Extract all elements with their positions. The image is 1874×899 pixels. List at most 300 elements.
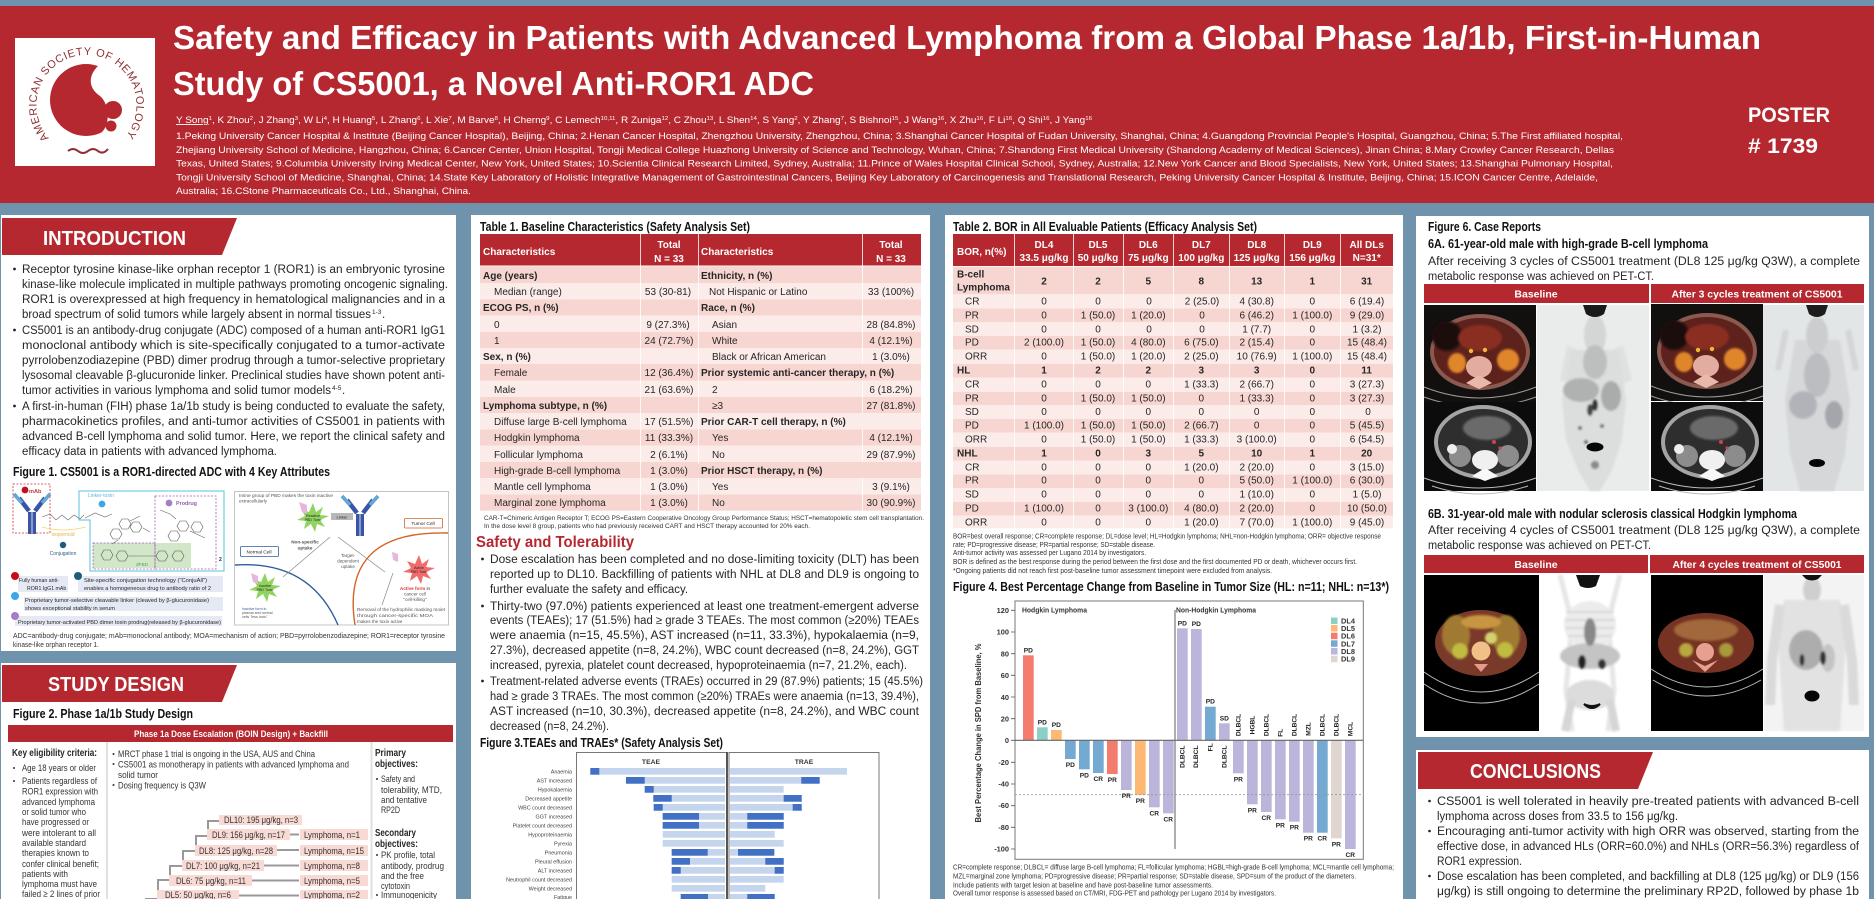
table 1: 6 (18.2%) bbox=[869, 385, 913, 396]
authors: Y Song 1, K Zhou 2, J Zhang 3, W Li 4, H Huang 5, L Zhang 6, L Xie 7, M Barve 8, H Cherng 9, C Lemech 10,11, R Zuniga 12, C Zhou 13, L Shen 14, S Yang 2, Y Zhang 7, S Bishnoi 15, J Wang 16, X Zhu 16, F Li 16, Q Shi 16, J Yang 16 bbox=[176, 115, 1092, 125]
figure 2 title: Figure 2. Phase 1a/1b Study Design bbox=[13, 707, 193, 721]
table 1: 0 bbox=[494, 320, 500, 331]
figure 1 title: Figure 1. CS5001 is a ROR1-directed ADC with 4 Key Attributes bbox=[13, 465, 330, 479]
subtype labels: DLBCL bbox=[1193, 746, 1200, 768]
table 2: 6 (46.2) bbox=[1239, 311, 1274, 322]
key eligibility criteria: Key eligibility criteria: bbox=[12, 748, 97, 759]
objectives: cytotoxin bbox=[381, 881, 410, 892]
table 2: 0 bbox=[1254, 407, 1260, 418]
table 1: Follicular lymphoma bbox=[494, 450, 583, 461]
figure 1 right: mechanism of action: Active form in bbox=[400, 586, 431, 591]
table 2: 6 (54.5) bbox=[1350, 435, 1384, 446]
table 2: 2 (66.7) bbox=[1184, 421, 1219, 432]
table 2: 0 bbox=[1199, 407, 1205, 418]
introduction text: kinase-like molecule implicated in multiple pathways promoting oncogenic signaling. bbox=[22, 279, 448, 291]
table 2: 1 bbox=[1310, 449, 1316, 460]
subtype labels: DLBCL bbox=[1236, 714, 1242, 736]
table 2: 0 bbox=[1365, 407, 1371, 418]
objectives: RP2D bbox=[381, 805, 400, 816]
table 2: N=31* bbox=[1353, 253, 1381, 264]
objectives: and tentative bbox=[381, 795, 427, 806]
table 1: Prior CAR-T cell therapy, n (%) bbox=[701, 417, 846, 428]
heading: introduction bbox=[2, 218, 237, 255]
table 1: Diffuse large B-cell lymphoma bbox=[494, 417, 627, 428]
introduction text: CS5001 is an antibody-drug conjugate (ADC) composed of a human anti-ROR1 IgG1 bbox=[22, 325, 445, 337]
panel: efficacy table and waterfall bbox=[945, 215, 1403, 899]
table 2: 15 (48.4) bbox=[1347, 352, 1387, 363]
figure 1 right: mechanism of action: cells "less toxic" bbox=[242, 615, 268, 619]
table 2: 1 (50.0) bbox=[1081, 421, 1115, 432]
table 2: 1 (50.0) bbox=[1131, 435, 1166, 446]
figure 4 footnotes: Include patients with target lesion at baseline and have post-baseline tumor assessments. bbox=[953, 880, 1213, 889]
response labels: CR bbox=[1164, 816, 1173, 823]
table 2: 50 μg/kg bbox=[1078, 253, 1118, 264]
dose escalation banner bbox=[8, 725, 453, 742]
table 2: 0 bbox=[1041, 490, 1047, 501]
dose escalation staircase: DL7: 100 μg/kg, n=21 bbox=[186, 861, 260, 872]
table 2 title: Table 2. BOR in All Evaluable Patients (Efficacy Analysis Set) bbox=[953, 220, 1257, 234]
y axis: -20 bbox=[998, 758, 1009, 767]
table 2 footnotes: *Ongoing patients did not reach first post-baseline tumor assessment timepoint were excluded from analysis. bbox=[953, 566, 1272, 575]
table 1: Race, n (%) bbox=[701, 303, 755, 314]
response labels: PR bbox=[1304, 836, 1313, 843]
subtype labels: MZL bbox=[1306, 722, 1312, 736]
figure 1 legend: Proprietary tumor-activated PBD dimer toxin prodrug(released by β-glucuronidase) bbox=[18, 620, 221, 626]
figure 4 waterfall chart: Hodgkin Lymphoma bbox=[1022, 607, 1087, 614]
response labels: PD bbox=[1192, 621, 1201, 628]
table 2: 2 (20.0) bbox=[1239, 504, 1274, 515]
TEAE category labels bbox=[506, 770, 572, 899]
table 2: 1 (20.0) bbox=[1184, 518, 1219, 529]
response labels: PD bbox=[1024, 647, 1033, 654]
subtype labels: FL bbox=[1278, 729, 1284, 737]
table 2: 0 bbox=[1310, 407, 1316, 418]
affiliations: Zhejiang University School of Medicine, Hangzhou, China; 6.Cancer Center, Union Hospital, Tongji Medical College Huazhong University of Science and Technology, Wuhan, China; 7.Shandong First Medical University (Shandong Academy of Medical Sciences), Jinan China; 8.Mary Crowley Cancer Research, Dellas bbox=[176, 145, 1615, 155]
table 2: 2 (15.4) bbox=[1239, 338, 1274, 349]
key eligibility criteria: confer clinical benefit; bbox=[22, 859, 99, 870]
table 2: 1 (100.0) bbox=[1024, 421, 1064, 432]
table 1: 30 (90.9%) bbox=[867, 498, 915, 509]
table 2: 0 bbox=[1310, 463, 1316, 474]
table 2: 1 (20.0) bbox=[1131, 311, 1166, 322]
case 6B column headers: Baseline bbox=[1514, 559, 1558, 571]
table 2: 100 μg/kg bbox=[1178, 253, 1224, 264]
conclusions text: μg/kg) is still ongoing to determine the preliminary RP2D, followed by phase 1b bbox=[1437, 886, 1859, 898]
legend: DL4 bbox=[1341, 616, 1356, 626]
table 2: 0 bbox=[1041, 394, 1047, 405]
case 6A baseline scans bbox=[1424, 305, 1649, 494]
figure 4 waterfall chart: Non-Hodgkin Lymphoma bbox=[1176, 607, 1256, 614]
introduction text: lysosomal cleavable β-glucuronide linker. Preclinical studies have shown potent anti- bbox=[22, 370, 445, 382]
case 6A text bbox=[1428, 237, 1860, 283]
safety text: were anaemia (n=15, 45.5%), AST increased (n=11, 33.3%), hypokalaemia (n=9, bbox=[489, 630, 919, 642]
table 2: 8 bbox=[1199, 277, 1205, 288]
response labels: PD bbox=[1178, 620, 1187, 627]
figure 1 right: mechanism of action: Active bbox=[414, 566, 424, 570]
safety text: reported up to DL10. Backfilling of patients with NHL at DL8 and DL9 is ongoing to bbox=[490, 569, 919, 581]
table 1: 2 (6.1%) bbox=[650, 450, 688, 461]
table 1: 53 (30-81) bbox=[645, 287, 691, 298]
figure 1 right: mechanism of action: Reactive bbox=[306, 514, 320, 518]
table 2: DL4 bbox=[1035, 240, 1054, 251]
figure 1 right: mechanism of action: makes the toxin active bbox=[357, 619, 403, 624]
table 2: 0 bbox=[1310, 435, 1316, 446]
table 2: 0 bbox=[1310, 394, 1316, 405]
safety text: events (TEAEs); 17 (51.5%) had ≥ grade 3 TEAEs. The most common (≥20%) TEAEs bbox=[490, 615, 919, 627]
figure 1 legend: Proprietary tumor-selective cleavable linker (cleaved by β-glucuronidase) bbox=[25, 598, 209, 604]
y axis: -40 bbox=[998, 780, 1009, 788]
table 1: ≥3 bbox=[712, 401, 723, 412]
table 2: 2 bbox=[1095, 366, 1101, 377]
table 1: Characteristics bbox=[701, 247, 774, 258]
TEAE category labels: WBC count decreased bbox=[518, 806, 572, 812]
table 2: 1 (3.2) bbox=[1353, 325, 1381, 336]
TEAE category labels: GGT increased bbox=[536, 814, 572, 820]
table 2: CR bbox=[965, 297, 979, 308]
figure 1 left: ADC structure: isoprenoid bbox=[51, 532, 75, 538]
dose escalation staircase: DL8: 125 μg/kg, n=28 bbox=[199, 846, 273, 857]
table 2: 0 bbox=[1146, 476, 1152, 487]
table 2: 1 (100.0) bbox=[1292, 352, 1332, 363]
case 6A post-treatment scans bbox=[1651, 304, 1864, 494]
table 1: High-grade B-cell lymphoma bbox=[494, 466, 621, 477]
figure 1 legend: shows exceptional stability in serum bbox=[25, 606, 115, 612]
title: Study of CS5001, a Novel Anti-ROR1 ADC bbox=[173, 66, 814, 103]
figure 1 footnote bbox=[13, 631, 445, 649]
table 2: 33.5 μg/kg bbox=[1020, 253, 1068, 264]
table 1: N = 33 bbox=[876, 254, 906, 265]
table 2: 2 bbox=[1095, 277, 1101, 288]
table 2: 0 bbox=[1310, 338, 1316, 349]
subtype labels: DLBCL bbox=[1222, 746, 1228, 768]
poster number: POSTER bbox=[1748, 104, 1830, 127]
subtype labels: DLBCL bbox=[1292, 714, 1298, 736]
table 2: 4 (30.8) bbox=[1239, 297, 1274, 308]
figure 1 footnote: ADC=antibody-drug conjugate; mAb=monoclonal antibody; MOA=mechanism of action; PBD=pyrrolobenzodiazepine; ROR1=receptor tyrosine bbox=[13, 631, 445, 640]
poster number: # 1739 bbox=[1748, 135, 1818, 158]
response labels: PR bbox=[1332, 841, 1341, 848]
response labels: PD bbox=[1206, 699, 1215, 706]
table 2: 20 bbox=[1361, 449, 1373, 460]
y axis: 0 bbox=[1005, 736, 1009, 745]
response labels: CR bbox=[1262, 815, 1271, 822]
table 2: CR bbox=[965, 463, 979, 474]
table 1: ECOG PS, n (%) bbox=[483, 303, 559, 314]
table 1: 11 (33.3%) bbox=[645, 433, 693, 444]
table 2: 2 bbox=[1041, 277, 1047, 288]
table 2: 0 bbox=[1254, 421, 1260, 432]
table 1: Black or African American bbox=[712, 352, 826, 363]
figure 1 legend: enables a homogeneous drug to antibody ratio of 2 bbox=[84, 586, 211, 592]
introduction text: . bbox=[342, 385, 345, 397]
TEAE category labels: Pyrexia bbox=[554, 842, 572, 848]
legend: DL9 bbox=[1341, 655, 1355, 664]
figure 1 legend: Site-specific conjugation technology ("ConjuAll") bbox=[84, 578, 207, 584]
figure 3 butterfly chart bbox=[506, 752, 879, 899]
dose escalation staircase: Lymphoma, n=5 bbox=[304, 876, 360, 887]
heading: study design bbox=[2, 665, 237, 702]
response labels: PR bbox=[1108, 777, 1117, 784]
table 2: 1 (50.0) bbox=[1081, 394, 1115, 405]
table 2: 2 bbox=[1146, 366, 1152, 377]
figure 4 waterfall chart bbox=[974, 601, 1363, 859]
table 2: 0 bbox=[1041, 297, 1047, 308]
figure 1 right: mechanism of action: uptake bbox=[341, 564, 355, 569]
table 2: 1 (100.0) bbox=[1292, 476, 1332, 487]
objectives: PK profile, total bbox=[381, 850, 435, 861]
table 1: 29 (87.9%) bbox=[867, 450, 915, 461]
table 1: Marginal zone lymphoma bbox=[494, 498, 606, 509]
figure 1 right: mechanism of action: Imine group of PBD makes the toxin inactive bbox=[239, 493, 333, 498]
table 2: 3 (100.0) bbox=[1128, 504, 1168, 515]
case 6B post-treatment scans bbox=[1651, 575, 1864, 731]
TEAE category labels: Hypoproteinaemia bbox=[528, 832, 572, 838]
table 2: PR bbox=[965, 394, 979, 405]
conclusions text: ROR1 expression. bbox=[1437, 856, 1522, 868]
panel: study design bbox=[1, 663, 456, 899]
objectives: objectives: bbox=[375, 839, 418, 850]
table 2: 2 (25.0) bbox=[1184, 352, 1219, 363]
TEAE category labels: Platelet count decreased bbox=[513, 824, 572, 830]
title bbox=[173, 20, 1761, 103]
table 2 footnotes: rate; PD=progressive disease; PR=partial response; SD=stable disease. bbox=[953, 540, 1155, 549]
table 2: 0 bbox=[1146, 407, 1152, 418]
table 2: 0 bbox=[1199, 325, 1205, 336]
objectives bbox=[375, 748, 444, 899]
table 1: Prior HSCT therapy, n (%) bbox=[701, 466, 822, 477]
y axis: -60 bbox=[998, 801, 1009, 810]
table 1: Yes bbox=[712, 482, 728, 493]
table 1: Age (years) bbox=[483, 271, 537, 282]
y axis: 100 bbox=[997, 628, 1009, 636]
table 2: 2 (20.0) bbox=[1239, 463, 1274, 474]
figure 1 right: mechanism of action: "cell-killing" bbox=[403, 597, 427, 602]
dose escalation staircase: DL6: 75 μg/kg, n=11 bbox=[176, 876, 246, 887]
TEAE category labels: Pleural effusion bbox=[535, 860, 572, 866]
case 6A text: 6A. 61-year-old male with high-grade B-cell lymphoma bbox=[1428, 237, 1709, 251]
table 2: 1 (33.3) bbox=[1184, 380, 1219, 391]
figure 4 footnotes: CR=complete response; DLBCL= diffuse large B-cell lymphoma; FL=follicular lymphoma; HGBL=high-grade B-cell lymphoma; MCL=mantle cell lymphoma; bbox=[953, 862, 1394, 871]
objectives: Secondary bbox=[375, 828, 416, 839]
study overview bullets: Dosing frequency is Q3W bbox=[118, 780, 207, 792]
case 6A column headers: Baseline bbox=[1514, 288, 1558, 300]
table 2: SD bbox=[965, 325, 979, 336]
y axis: Best Percentage Change in SPD from Baseline, % bbox=[974, 643, 983, 822]
figure 1 right: mechanism of action: Tumor Cell bbox=[411, 521, 435, 527]
figure 1 right: mechanism of action bbox=[234, 492, 448, 625]
objectives: Primary bbox=[375, 748, 406, 759]
table 2 footnotes bbox=[953, 532, 1381, 575]
figure 6 title: Figure 6. Case Reports bbox=[1428, 220, 1541, 234]
response labels: PR bbox=[1234, 776, 1243, 783]
y axis: 120 bbox=[997, 606, 1009, 615]
key eligibility criteria: or solid tumor who bbox=[22, 807, 86, 818]
response labels: PD bbox=[1066, 762, 1075, 769]
y axis: 40 bbox=[1001, 693, 1009, 702]
table 2: 0 bbox=[1041, 435, 1047, 446]
table 1: 1 (3.0%) bbox=[650, 482, 688, 493]
table 1: 3 (9.1%) bbox=[872, 482, 910, 493]
table 2: 1 (10.0) bbox=[1239, 490, 1274, 501]
response labels: PR bbox=[1122, 793, 1131, 800]
safety text: had ≥ grade 3 TRAEs. The most common (≥20%) TRAEs were anaemia (n=13, 39.4%), bbox=[490, 691, 919, 703]
table 1: Yes bbox=[712, 433, 728, 444]
response labels: PD bbox=[1080, 772, 1089, 779]
table 2: 11 bbox=[1361, 366, 1372, 377]
table 2: 1 (7.7) bbox=[1242, 325, 1271, 336]
TEAE category labels: Pneumonia bbox=[545, 850, 572, 856]
table 2: 0 bbox=[1095, 297, 1101, 308]
table 2: 1 (50.0) bbox=[1081, 338, 1115, 349]
key eligibility criteria: patients with bbox=[22, 869, 68, 880]
case 6A text: After receiving 3 cycles of CS5001 treatment (DL8 125 μg/kg Q3W), a complete bbox=[1428, 256, 1860, 268]
figure 1 right: mechanism of action: Inactive bbox=[259, 584, 271, 588]
introduction text: A first-in-human (FIH) phase 1a/1b study is being conducted to evaluate the safety, bbox=[22, 401, 445, 413]
table 1: Median (range) bbox=[494, 287, 562, 298]
title: Safety and Efficacy in Patients with Advanced Lymphoma from a Global Phase 1a/1b, First-in-Human bbox=[173, 20, 1761, 57]
table 2: 0 bbox=[1095, 380, 1101, 391]
introduction text bbox=[13, 264, 448, 458]
subtype labels: HGBL bbox=[1250, 716, 1256, 734]
figure 4 footnotes bbox=[953, 862, 1394, 898]
case 6A text: metabolic response was achieved on PET-CT. bbox=[1428, 271, 1654, 283]
table 1: 24 (72.7%) bbox=[645, 336, 693, 347]
table 1: 9 (27.3%) bbox=[646, 320, 690, 331]
figure 1 legend: ROR1 IgG1 mAb bbox=[27, 586, 66, 592]
response labels: SD bbox=[1220, 715, 1229, 722]
panel: introduction bbox=[1, 215, 456, 651]
introduction text: . bbox=[382, 309, 385, 321]
table 2: 0 bbox=[1041, 325, 1047, 336]
table 2: 1 (100.0) bbox=[1024, 504, 1064, 515]
objectives: objectives: bbox=[375, 759, 418, 770]
table 2: 9 (29.0) bbox=[1350, 311, 1384, 322]
table 2: 2 (100.0) bbox=[1024, 338, 1064, 349]
key eligibility criteria: Age 18 years or older bbox=[22, 763, 97, 774]
table 2: 5 (45.5) bbox=[1350, 421, 1384, 432]
key eligibility criteria: lymphoma must have bbox=[22, 879, 97, 890]
heading: study design: STUDY DESIGN bbox=[48, 674, 184, 696]
table 2: 0 bbox=[1310, 504, 1316, 515]
TEAE category labels: AST increased bbox=[537, 778, 572, 784]
table 1: No bbox=[712, 498, 725, 509]
table 2: 0 bbox=[1095, 407, 1101, 418]
table 1: Characteristics bbox=[483, 247, 556, 258]
table 1 footnote: In the dose level 8 group, patients who had previously received CART and HSCT therapy accounted for 20% each. bbox=[484, 523, 810, 530]
table 2: PD bbox=[965, 421, 979, 432]
study overview bullets bbox=[112, 749, 349, 792]
figure 1 right: mechanism of action: uptake bbox=[298, 546, 313, 550]
table 2: 1 (50.0) bbox=[1081, 311, 1115, 322]
table 2: 3 bbox=[1199, 366, 1205, 377]
table 2: 0 bbox=[1041, 463, 1047, 474]
table 2 footnotes: BOR=best overall response; CR=complete response; DL=dose level; HL=Hodgkin lymphoma; NHL=non-Hodgkin lymphoma; ORR= objective response bbox=[953, 532, 1381, 540]
table 1 footnote: CAR-T=Chimeric Antigen Receptor T; ECOG PS=Eastern Cooperative Oncology Group Performance Status; HSCT=hematopoietic stem cell transplantation. bbox=[484, 515, 924, 522]
figure 1 legend bbox=[11, 572, 223, 626]
table 2: 1 (50.0) bbox=[1081, 352, 1115, 363]
study overview bullets: CS5001 as monotherapy in patients with advanced lymphoma and bbox=[118, 760, 349, 770]
table 2: 1 (100.0) bbox=[1292, 311, 1332, 322]
figure 3 butterfly chart: TEAE bbox=[642, 759, 661, 766]
figure 1 right: mechanism of action: Non-specific bbox=[291, 540, 319, 544]
table 2: 0 bbox=[1199, 311, 1205, 322]
TEAE category labels: Hypokalaemia bbox=[538, 788, 572, 794]
table 2: DL7 bbox=[1192, 240, 1211, 251]
heading: safety and tolerability: Safety and Tolerability bbox=[476, 534, 634, 551]
table 2: 0 bbox=[1041, 518, 1047, 529]
figure 1 left: ADC structure bbox=[11, 484, 224, 626]
table 1: No bbox=[712, 450, 725, 461]
figure 1 right: mechanism of action: cancer cell bbox=[404, 592, 426, 596]
affiliations: Tongji University School of Medicine, Shanghai, China; 14.State Key Laboratory of Holistic Integrative Management of Gastrointestinal Cancers, Beijing Key Laboratory of Carcinogenesis and Translational Research, Peking University Cancer Hospital & Institute, Beijing, China; 15.ICON Cancer Centre, Adelaide, bbox=[176, 172, 1598, 182]
figure 1 right: mechanism of action: Removal of the hydrophilic masking moiet bbox=[357, 607, 446, 612]
table 2: BOR, n(%) bbox=[957, 247, 1006, 258]
table 2: 125 μg/kg bbox=[1234, 253, 1280, 264]
panel: baseline table and safety bbox=[471, 215, 930, 899]
table 1: N = 33 bbox=[654, 254, 684, 265]
table 2: 0 bbox=[1310, 490, 1316, 501]
introduction text: broad spectrum of solid tumors while largely absent in normal tissues bbox=[22, 309, 371, 321]
safety text: Treatment-related adverse events (TRAEs) occurred in 29 (87.9%) patients; 15 (45.5%) bbox=[490, 676, 923, 688]
table 2 footnotes: BOR is defined as the best response during the period between the first dose and the first documented PD or death, whichever occurs first. bbox=[953, 557, 1357, 566]
figure 3 butterfly chart: TRAE bbox=[795, 759, 814, 766]
figure 1 right: mechanism of action: through cancer-specific MOA bbox=[357, 613, 434, 618]
case 6B column headers bbox=[1424, 555, 1864, 573]
table 2: 6 (19.4) bbox=[1350, 297, 1384, 308]
response labels: CR bbox=[1318, 836, 1327, 843]
figure 1 left: ADC structure: Prodrug bbox=[176, 501, 197, 507]
table 2: PR bbox=[965, 311, 979, 322]
table 1: Total bbox=[879, 240, 903, 251]
table 1: 1 (3.0%) bbox=[872, 352, 910, 363]
key eligibility criteria: therapies known to bbox=[22, 848, 89, 859]
table 2: 0 bbox=[1095, 518, 1101, 529]
safety text: Dose escalation has been completed and no dose-limiting toxicity (DLT) has been bbox=[490, 554, 919, 566]
table 2: B-cell bbox=[957, 270, 984, 281]
table 2: 5 (50.0) bbox=[1239, 476, 1274, 487]
TEAE bars light bbox=[590, 768, 847, 899]
case 6B baseline scans bbox=[1424, 575, 1650, 731]
table 2: ORR bbox=[965, 435, 987, 446]
figure 1 right: mechanism of action: PBD Toxin bbox=[257, 588, 273, 592]
conclusions text: lymphoma across doses from 33.5 to 156 μg/kg. bbox=[1437, 811, 1678, 823]
introduction text: monoclonal antibody which is site-specifically conjugated to a tumor-activate bbox=[22, 340, 445, 352]
objectives: and the free bbox=[381, 871, 424, 882]
table 2: 0 bbox=[1310, 325, 1316, 336]
subtype labels: DLBCL bbox=[1320, 714, 1326, 736]
table 2: PR bbox=[965, 476, 979, 487]
introduction text: advanced B-cell lymphoma and solid tumor. Here, we report the clinical safety and bbox=[22, 431, 445, 443]
case 6B text: After receiving 4 cycles of CS5001 treatment (DL8 125 μg/kg Q3W), a complete bbox=[1428, 525, 1860, 537]
affiliations bbox=[176, 131, 1623, 196]
table 2: 0 bbox=[1041, 407, 1047, 418]
table 1: Hodgkin lymphoma bbox=[494, 433, 580, 444]
table 2: 1 (100.0) bbox=[1292, 518, 1332, 529]
table 2: DL6 bbox=[1139, 240, 1158, 251]
figure 1 left: ADC structure: 2 bbox=[219, 557, 222, 563]
table 2: 1 (5.0) bbox=[1353, 490, 1381, 501]
response labels: PD bbox=[1052, 722, 1061, 729]
legend: DL6 bbox=[1341, 632, 1355, 641]
figure 4 title: Figure 4. Best Percentage Change from Baseline in Tumor Size (HL: n=11; NHL: n=13*) bbox=[953, 580, 1389, 594]
table 2 bbox=[953, 234, 1393, 529]
conclusions text: Dose escalation has been completed, and backfilling at DL8 (125 μg/kg) or DL9 (156 bbox=[1437, 871, 1859, 883]
table 2: 0 bbox=[1041, 476, 1047, 487]
table 1: 4 (12.1%) bbox=[869, 433, 913, 444]
table 2: SD bbox=[965, 407, 979, 418]
panel: figure 6 case reports bbox=[1416, 216, 1869, 737]
response labels: PR bbox=[1136, 798, 1145, 805]
